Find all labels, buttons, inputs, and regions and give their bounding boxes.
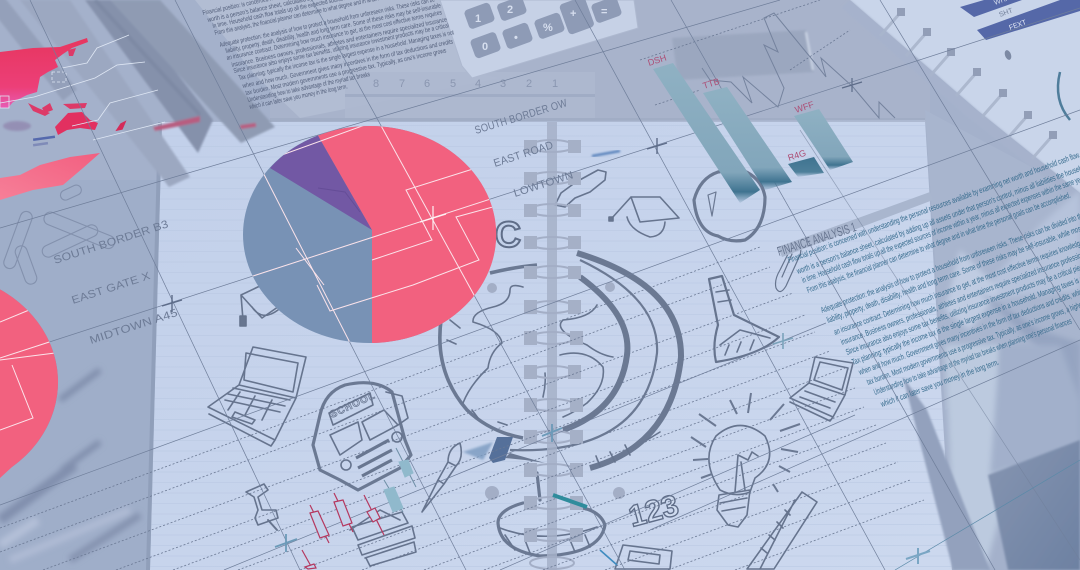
bar labels: TTB (702, 76, 721, 91)
sketch: calculator (615, 545, 672, 569)
calculator: % (543, 22, 553, 34)
notepad page, top right (842, 0, 1080, 453)
ruler on desk: 1 (552, 78, 558, 90)
globe: sphere left (440, 265, 537, 438)
street labels: MIDTOWN A45 (88, 307, 179, 347)
printed text on book page: insurance. Business owners, professionals, athletes and entertainers require specialized insurance (231, 16, 448, 69)
book page, top centre (195, 0, 500, 118)
ruler on desk: 8 (373, 78, 379, 90)
paragraph: protection and tax: which it can later save you money in the long term. (879, 357, 1000, 409)
street labels: EAST ROAD (492, 139, 555, 170)
white overlay lines on pies (0, 126, 492, 430)
finance analysis text block (775, 146, 1080, 409)
phone on desk (672, 30, 814, 80)
crosshair markers (162, 78, 930, 564)
blue label bars, top right: FEXT (1008, 19, 1028, 32)
sketch: graduation cap left (240, 285, 285, 326)
notebook paper (146, 118, 952, 570)
printed text on book page: when and how much. Government gives many incentives in the form of tax deductions and credits (241, 38, 454, 90)
printed text on book page (202, 0, 455, 111)
globe: bracket (489, 437, 513, 463)
sketch: flask (709, 276, 779, 362)
sketch: laptop right (790, 357, 853, 421)
sketch: school bus (313, 383, 411, 490)
candlestick series (302, 448, 416, 569)
calculator (440, 0, 638, 78)
binder holes (485, 282, 625, 500)
sketch: globe (440, 253, 681, 556)
sketch: push pin (246, 484, 278, 530)
globe: continents (463, 286, 613, 417)
ruler on desk: 6 (424, 78, 430, 90)
map: pink landmass (0, 153, 100, 200)
globe: stand (498, 473, 605, 556)
ruler on desk (345, 72, 595, 118)
ruler on desk: 4 (475, 78, 481, 90)
sketch: paper clip (776, 243, 801, 292)
blue label bars, top right: SHT (998, 7, 1015, 19)
gauge arc, top right (1003, 49, 1070, 120)
bar chart (647, 13, 895, 203)
paragraph: protection and tax (819, 210, 1080, 409)
lower right desk: pencil and book (903, 345, 1080, 570)
street labels: SOUTH BORDER B3 (52, 218, 170, 267)
blue accent marks (463, 151, 620, 565)
bar: TTB (703, 87, 792, 190)
calculator: + (570, 8, 576, 20)
sketch: number 123: 123 (625, 489, 682, 534)
map connector lines (0, 35, 165, 140)
street labels: SOUTH BORDER OW (473, 97, 569, 137)
pie chart: large (243, 126, 496, 343)
map: New Zealand (117, 122, 125, 130)
map: blurred patch (3, 121, 31, 131)
bar labels (647, 53, 816, 163)
heading: FINANCE ANALYSIS 1 (775, 219, 858, 259)
printed text on book page: tax burden. Most modern governments use a progressive tax. Typically, as one's income grows (245, 47, 447, 97)
blue label bars, top right (960, 0, 1080, 40)
ruler on desk: 2 (526, 78, 532, 90)
calculator: 1 (475, 13, 481, 25)
sketch: letter C: C (495, 214, 521, 255)
map: blue marks (33, 135, 55, 146)
sketch: apple (694, 170, 765, 241)
bar labels: R4G (787, 148, 807, 163)
globe: sphere right (563, 277, 627, 430)
printed text on book page: Tax planning: typically the income tax is the single largest expense in a household. Managing taxes is not (238, 29, 455, 82)
sketch: laptop left (208, 347, 306, 446)
notepad spiral rings (880, 8, 1057, 159)
calculator: 0 (482, 41, 488, 53)
printed text on book page: Understanding how to take advantage of the myriad tax breaks (247, 71, 371, 104)
ruler on desk: 5 (450, 78, 456, 90)
ruler on desk: 7 (399, 78, 405, 90)
sketch: graduation cap (609, 197, 679, 237)
notebook spine and rings (524, 122, 583, 570)
globe: outer arm (577, 253, 681, 468)
calculator: = (601, 6, 607, 18)
calculator: • (514, 32, 518, 44)
globe: inner meridian (510, 260, 657, 450)
bar: DSH (653, 63, 760, 203)
bar labels: WFF (794, 99, 816, 115)
printed text on book page: Since insurance also enjoys some tax benefits, utilizing insurance investment products may be a critical (233, 22, 450, 75)
desk photo: pencils lying over the paper, top left (0, 0, 275, 187)
line series (702, 13, 895, 118)
sketch: light bulb with rays (691, 393, 800, 527)
sketch: paint brush (422, 443, 461, 512)
sketch: hand and pointer (555, 170, 606, 207)
bar: R4G (788, 157, 824, 177)
pie chart: left, partial (0, 272, 58, 492)
bar: WFF (794, 109, 853, 170)
calculator: 2 (507, 4, 513, 16)
world map, red regions (0, 38, 125, 200)
sketch: stack of books (350, 510, 416, 566)
bus sign text: SCHOOL (329, 390, 377, 421)
map: Australia (55, 112, 98, 135)
ruler on desk: 3 (500, 78, 506, 90)
street labels (52, 97, 575, 347)
sketch: ruler (747, 492, 817, 569)
bar labels: DSH (647, 53, 668, 68)
printed text on book page: which it can later save you money in the long term. (248, 83, 348, 111)
lower left desk: pencil cup and paper clips (0, 183, 140, 560)
street labels: LOWTOWN (512, 169, 575, 200)
street labels: EAST GATE X (70, 270, 152, 307)
